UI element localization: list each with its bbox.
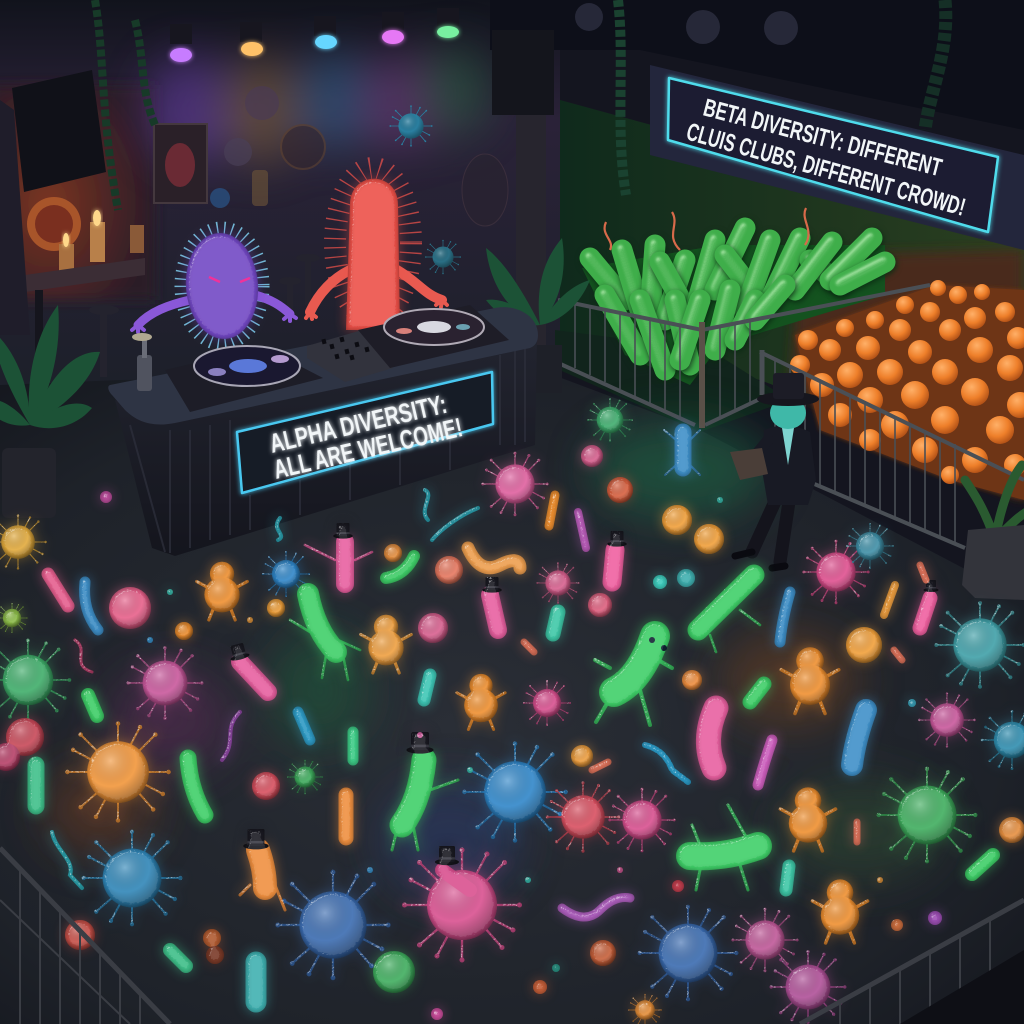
booth slats (130, 348, 525, 553)
bottom-right dark stairs (900, 950, 1024, 1024)
squiggle teal (277, 490, 478, 540)
hatted rod (240, 829, 285, 910)
bouncer suit (762, 425, 816, 505)
glass on booth (132, 333, 152, 391)
right wall curtain column (516, 110, 546, 350)
virus (771, 952, 845, 1022)
alpha text line 1: ALPHA DIVERSITY: (267, 389, 450, 459)
mixer (307, 330, 393, 382)
round wall plaque (27, 197, 81, 251)
dance floor (0, 370, 1024, 1024)
large rod with face (595, 636, 672, 725)
virus (524, 681, 570, 725)
bouncer head (770, 397, 806, 429)
booth front (115, 340, 537, 556)
coccus (418, 613, 448, 643)
light orange (240, 22, 263, 56)
red cilia (335, 168, 411, 318)
coccus (267, 599, 285, 617)
bottom-right railing (800, 900, 1024, 1024)
rod (386, 556, 414, 578)
coccus (581, 445, 603, 467)
rod with limbs (290, 594, 360, 680)
bouncer shirt (782, 428, 794, 465)
beta sign backing (650, 65, 1024, 250)
rod (750, 684, 764, 702)
rod (170, 950, 186, 966)
DJ red microbe (306, 168, 447, 330)
dark green floor behind railing (555, 330, 790, 432)
virus (483, 453, 547, 515)
rod (884, 585, 895, 615)
floor colour glows (45, 420, 940, 900)
coccus (175, 622, 193, 640)
virus (278, 872, 388, 978)
coccus (588, 593, 612, 617)
hanging vine centre (618, 0, 626, 195)
plant left pot (2, 448, 56, 518)
rod with limbs (698, 575, 760, 652)
hatted rod (607, 531, 627, 582)
purple hands (132, 314, 296, 332)
wall light glow (145, 45, 490, 165)
rod (852, 710, 866, 765)
left wall column (0, 100, 30, 335)
plant right (962, 465, 1024, 600)
rod (246, 962, 266, 1002)
virus (0, 640, 69, 720)
green crowd background (582, 208, 885, 385)
stools (89, 254, 320, 377)
left turntable (165, 346, 323, 412)
wall decorations (210, 86, 508, 226)
purple body (182, 231, 262, 341)
rod (972, 855, 993, 874)
light blue (314, 16, 337, 49)
plant right pot (962, 525, 1024, 600)
rod (88, 695, 97, 716)
virus (629, 995, 661, 1024)
virus (640, 907, 736, 999)
coccus (999, 817, 1024, 843)
purple eyes (209, 277, 250, 282)
coccus (373, 951, 415, 993)
peanut microbe (361, 615, 411, 673)
red body (346, 179, 400, 330)
light purple (170, 24, 192, 62)
bouncer legs (752, 495, 790, 562)
squiggle cyan (52, 832, 82, 888)
rod (780, 592, 790, 642)
plant middle (486, 238, 590, 393)
bottom-left railing (0, 848, 170, 1024)
virus (547, 783, 619, 851)
hanging vine right (925, 0, 946, 130)
rod (549, 495, 555, 526)
rod (48, 574, 68, 606)
rod (578, 512, 586, 548)
alpha diversity sign (237, 372, 493, 493)
virus (404, 850, 520, 960)
virus (610, 789, 674, 851)
peanut microbe (781, 647, 839, 714)
purple arms (138, 295, 290, 325)
rod with flagella (664, 430, 700, 475)
large rod (690, 805, 758, 890)
chain microbe (645, 745, 688, 782)
rod (786, 866, 789, 890)
rod (553, 612, 558, 634)
right turntable (358, 305, 509, 368)
framed picture (154, 124, 207, 203)
left orange wall (0, 85, 155, 300)
bouncer shoes (735, 552, 785, 568)
coccus (846, 627, 882, 663)
hatted rod (227, 642, 268, 692)
hatted rod (920, 580, 938, 628)
small rods (524, 565, 926, 842)
coccus (682, 670, 702, 690)
chain rod (562, 898, 630, 917)
beta upper wall speaker (492, 30, 554, 115)
virus (936, 603, 1024, 687)
virus (0, 604, 27, 632)
coccus (435, 556, 463, 584)
virus (919, 694, 975, 746)
coccus (0, 743, 20, 771)
red squiggles (605, 208, 809, 250)
plant left (0, 305, 100, 518)
light magenta (382, 12, 404, 44)
green room railing (556, 285, 930, 428)
coccus (607, 477, 633, 503)
DJ purple microbe (132, 228, 296, 344)
red arms (310, 270, 442, 312)
beta sign panel (668, 78, 998, 232)
beta diversity sign (668, 78, 998, 232)
back wall of club (0, 0, 560, 400)
rod (188, 758, 205, 815)
orange room railing (760, 350, 1024, 548)
coccus (571, 745, 593, 767)
light green (437, 8, 459, 38)
orange cocci (790, 280, 1024, 484)
rod (28, 765, 44, 806)
rod (758, 740, 772, 785)
dark ceiling right (490, 0, 1024, 130)
wall virus decoration (390, 106, 432, 146)
bouncer hat (757, 373, 819, 406)
disco lights (170, 8, 459, 62)
hatted microbe (435, 846, 470, 890)
squiggle pink (75, 640, 92, 672)
coccus (65, 920, 95, 950)
coccus (590, 940, 616, 966)
virus (464, 744, 566, 840)
orange crowd (790, 280, 1024, 500)
peanut microbe (457, 674, 505, 730)
rod (708, 708, 716, 768)
rod (338, 795, 354, 838)
wall plant ornament (426, 240, 460, 274)
rod (85, 582, 98, 630)
virus (847, 524, 893, 568)
alpha text line 2: ALL ARE WELCOME! (271, 412, 465, 485)
large hatted rod (392, 732, 458, 850)
coccus (384, 544, 402, 562)
coccus (252, 772, 280, 800)
hanging vines left (95, 0, 155, 210)
alpha sign panel (237, 372, 493, 493)
wavy rod (468, 548, 520, 568)
virus (263, 552, 309, 596)
peanut microbe (780, 787, 836, 851)
rod (298, 712, 310, 740)
virus (537, 563, 579, 603)
rod (348, 732, 358, 760)
coccus (6, 718, 44, 756)
shelf table (25, 258, 145, 380)
speaker (12, 70, 106, 192)
purple cilia (181, 228, 263, 344)
bouncer tablet (730, 448, 768, 480)
virus (982, 711, 1024, 769)
virus (84, 832, 180, 924)
green rods (590, 228, 885, 370)
virus (733, 909, 797, 971)
green room back wall (560, 100, 1024, 480)
hatted rod (305, 523, 372, 584)
hatted rod (482, 577, 502, 630)
candles on shelf (59, 210, 144, 274)
virus (804, 541, 868, 603)
virus (0, 516, 46, 568)
rod (424, 675, 430, 700)
confetti dots (100, 491, 942, 1020)
plant middle pot (534, 345, 562, 393)
disco balls (575, 3, 798, 45)
virus (588, 399, 632, 441)
coccus (109, 587, 151, 629)
virus (67, 724, 169, 820)
bouncer arm (750, 440, 768, 462)
bouncer in top hat (730, 373, 819, 568)
DJ booth (108, 305, 538, 556)
red hands (306, 300, 447, 319)
orange room glow (790, 250, 1024, 500)
squiggle purple (222, 712, 240, 760)
peanut microbe (812, 879, 868, 943)
coccus (694, 524, 724, 554)
coccus (662, 505, 692, 535)
floor microbes (0, 399, 1024, 1024)
peanut microbe (197, 562, 247, 620)
virus (288, 760, 322, 794)
virus (128, 648, 202, 718)
virus (879, 769, 975, 861)
booth top (108, 307, 538, 425)
